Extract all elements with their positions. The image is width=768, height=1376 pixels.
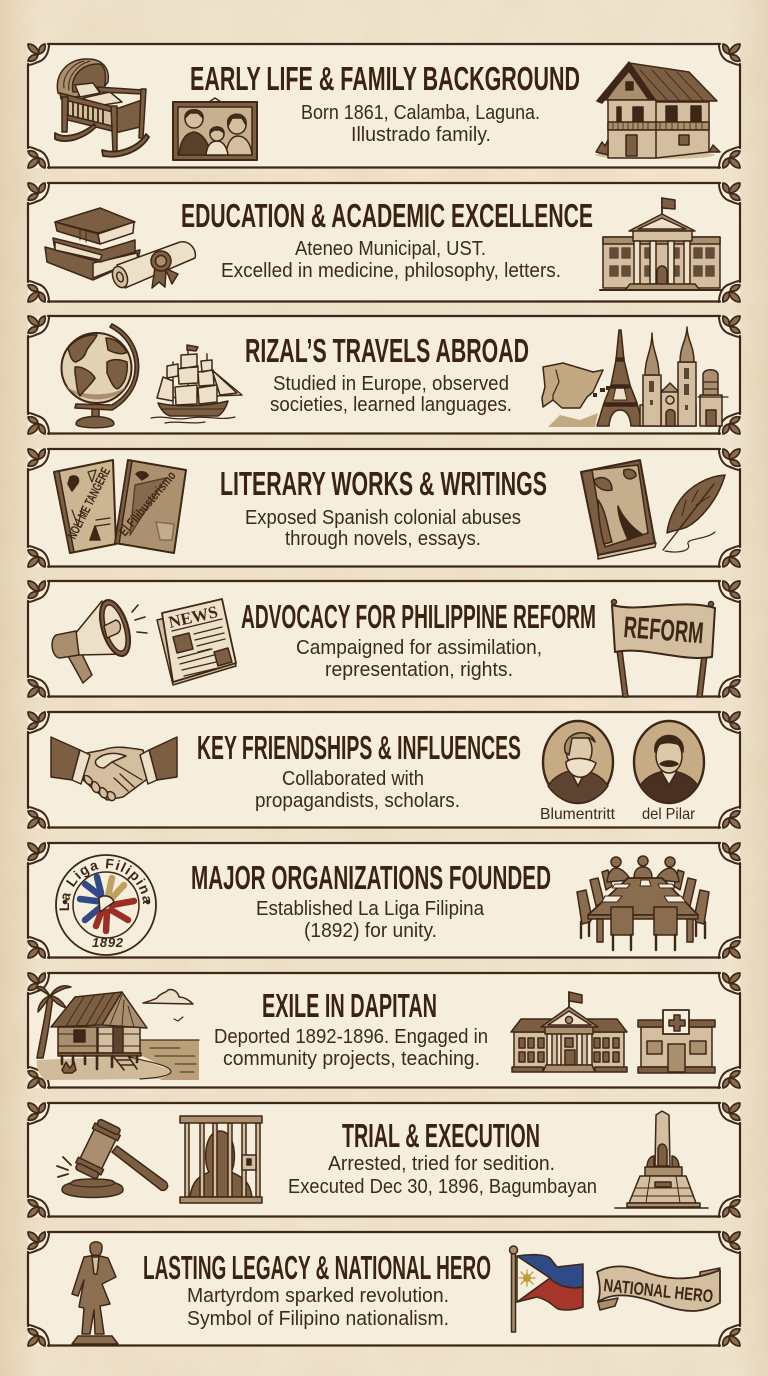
text block: Ateneo Municipal, UST. — [295, 238, 486, 260]
icon: stack of books — [45, 208, 140, 280]
text block: Arrested, tried for sedition. — [328, 1153, 555, 1175]
icon: globe — [62, 324, 139, 428]
panel: friendships — [28, 712, 740, 828]
icon: cradle — [55, 59, 149, 157]
icon: cathedral — [640, 327, 696, 426]
icon: diploma — [110, 242, 195, 290]
heading: MAJOR ORGANIZATIONS FOUNDED — [191, 859, 551, 896]
icon: quill — [663, 475, 725, 552]
icon: meeting table — [577, 856, 709, 950]
heading: LASTING LEGACY & NATIONAL HERO — [143, 1249, 491, 1286]
icon: jail cell — [180, 1116, 262, 1203]
text block: community projects, teaching. — [223, 1048, 480, 1070]
icon: Noli Me Tangere pamphlet: NOLI ME TANGERE — [64, 465, 113, 541]
icon: gavel — [57, 1118, 168, 1198]
text block: Executed Dec 30, 1896, Bagumbayan — [288, 1176, 597, 1198]
icon: family portrait — [173, 98, 257, 160]
text block: Exposed Spanish colonial abuses — [245, 507, 521, 529]
icon: Rizal statue — [72, 1242, 118, 1344]
text block: propagandists, scholars. — [255, 790, 460, 812]
icon: university building — [600, 198, 722, 290]
icon: portrait of del Pilar — [634, 721, 704, 803]
icon: megaphone — [52, 596, 147, 683]
icon: palm tree — [36, 986, 71, 1058]
text block: Campaigned for assimilation, — [296, 637, 542, 659]
text block: Martyrdom sparked revolution. — [187, 1285, 449, 1307]
panel: travels — [28, 316, 740, 434]
text block: through novels, essays. — [285, 528, 481, 550]
panel: organizations — [26, 842, 742, 959]
icon: newspaper: NEWS — [167, 602, 220, 632]
text block: Studied in Europe, observed — [273, 373, 509, 395]
text block: representation, rights. — [325, 659, 513, 681]
text block: Established La Liga Filipina — [256, 898, 485, 920]
icon: book — [581, 460, 656, 559]
heading: LITERARY WORKS & WRITINGS — [220, 465, 547, 502]
heading: RIZAL’S TRAVELS ABROAD — [245, 332, 529, 369]
icon: Rizal monument — [615, 1111, 708, 1208]
panel: literary works — [28, 449, 740, 567]
label: Blumentritt: Blumentritt — [540, 806, 616, 823]
heading: KEY FRIENDSHIPS & INFLUENCES — [197, 729, 521, 766]
icon: bahay na bato house — [595, 62, 720, 159]
text block: (1892) for unity. — [304, 920, 437, 942]
icon: Eiffel tower — [597, 330, 643, 426]
icon: Iberia map — [542, 363, 611, 427]
icon: newspaper — [157, 599, 236, 685]
heading: TRIAL & EXECUTION — [342, 1117, 540, 1154]
icon: old tower building — [698, 370, 728, 426]
text block: Symbol of Filipino nationalism. — [187, 1308, 449, 1330]
icon: La Liga Filipina seal: 1892 — [92, 935, 124, 950]
panel: education — [28, 183, 740, 302]
icon: nipa hut by the sea — [37, 989, 199, 1080]
icon: reform banner — [612, 600, 715, 697]
icon: handshake — [51, 737, 177, 801]
text block: Illustrado family. — [351, 124, 491, 146]
heading: EXILE IN DAPITAN — [262, 987, 437, 1024]
text block: societies, learned languages. — [270, 394, 512, 416]
panel: early life — [28, 44, 740, 168]
panel: legacy — [28, 1232, 740, 1346]
text block: Born 1861, Calamba, Laguna. — [301, 102, 540, 124]
icon: portrait of Blumentritt — [543, 721, 613, 803]
panel: exile — [28, 973, 740, 1088]
icon: sailing ship — [151, 345, 242, 423]
panel: trial — [28, 1103, 740, 1217]
text block: Collaborated with — [282, 768, 424, 790]
icon: National Hero ribbon — [597, 1266, 720, 1311]
text block: Excelled in medicine, philosophy, letters. — [221, 260, 561, 282]
icon: reform banner: REFORM — [622, 611, 705, 650]
icon: La Liga Filipina seal: La Liga Filipina — [59, 858, 150, 910]
icon: El Filibusterismo pamphlet — [115, 460, 186, 553]
label: del Pilar: del Pilar — [642, 806, 696, 823]
icon: school building — [511, 992, 627, 1072]
icon: Noli Me Tangere pamphlet — [54, 460, 116, 553]
icon: National Hero ribbon: NATIONAL HERO — [603, 1275, 714, 1306]
icon: El Filibusterismo pamphlet: El Filibusterismo — [116, 468, 179, 539]
text block: Deported 1892-1896. Engaged in — [214, 1026, 488, 1048]
icon: La Liga Filipina seal — [55, 854, 157, 956]
icon: clinic — [638, 1010, 715, 1073]
icon: Philippine flag — [510, 1246, 583, 1332]
panel: advocacy — [28, 581, 740, 697]
